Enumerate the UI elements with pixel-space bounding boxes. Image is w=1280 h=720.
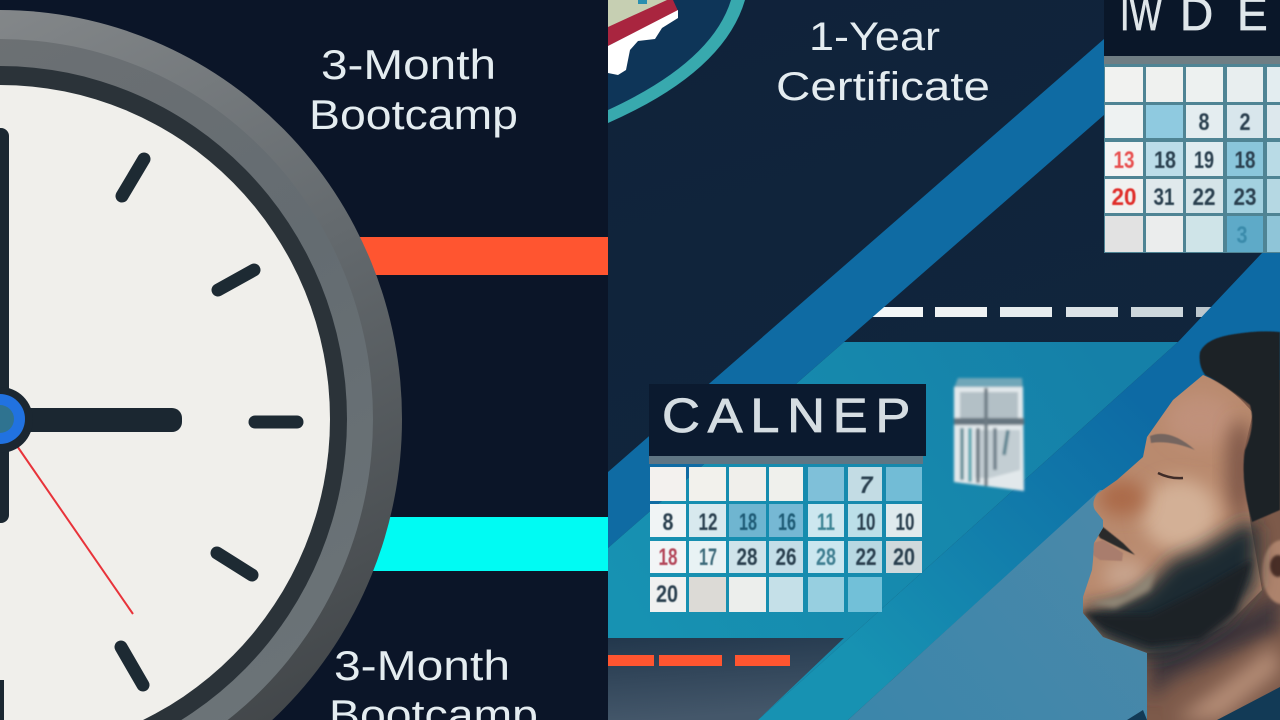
calendar numbers [656, 472, 915, 608]
calendar numbers: 18 [739, 509, 757, 536]
heading: 1-Year Certificate: Certificate [776, 65, 990, 109]
hour ticks [121, 159, 297, 685]
calendar numbers: 18 [1234, 147, 1256, 174]
calendar numbers: 31 [1154, 184, 1174, 211]
calendar numbers: 18 [1154, 147, 1176, 174]
calendar numbers: 20 [1112, 184, 1136, 211]
calendar numbers: 8 [662, 509, 674, 536]
white dashed line [869, 307, 1216, 317]
teal diagonal panel [608, 342, 1178, 720]
heading: 1-Year Certificate [776, 15, 990, 109]
calendar numbers: 13 [1114, 147, 1134, 174]
calendar: center [649, 384, 926, 612]
calendar numbers: 28 [736, 544, 758, 571]
beard [1083, 520, 1258, 658]
calendar numbers: 7 [860, 472, 874, 499]
calendar grid [1104, 56, 1280, 253]
calendar numbers: 8 [1198, 109, 1210, 136]
neck shading [1150, 590, 1280, 720]
calendar numbers: 16 [778, 509, 796, 536]
neck [1147, 380, 1280, 720]
calendar numbers: 11 [817, 509, 835, 536]
closed eye [1158, 473, 1183, 478]
calendar numbers: 17 [699, 544, 717, 571]
panel: right background [608, 0, 1280, 720]
calendar numbers: 10 [856, 509, 876, 536]
calendar numbers [1112, 109, 1256, 249]
calendar numbers: 22 [1192, 184, 1216, 211]
icon: clock [0, 10, 402, 720]
heading: 3-Month Bootcamp top: 3-Month [321, 41, 496, 88]
calendar numbers: 20 [656, 581, 678, 608]
calendar numbers: 26 [776, 544, 796, 571]
cyan bar [340, 517, 608, 571]
calendar: top right [1104, 0, 1280, 253]
heading: 3-Month Bootcamp top: Bootcamp [309, 91, 518, 138]
eyebrow [1150, 434, 1195, 450]
face skin [1083, 375, 1262, 653]
calendar numbers: 19 [1194, 147, 1214, 174]
calendar numbers: 28 [816, 544, 836, 571]
calendar numbers: 10 [896, 509, 914, 536]
calendar header [649, 384, 926, 456]
orange bar [340, 237, 608, 275]
heading: 1-Year Certificate: 1-Year [809, 15, 940, 59]
icon: circular badge fragment [608, 0, 745, 123]
ear [1262, 540, 1280, 604]
calendar header: CALNEP [662, 390, 918, 443]
calendar numbers: 3 [1236, 222, 1248, 249]
clock rim [0, 10, 402, 720]
mustache and lips [1097, 527, 1135, 555]
calendar numbers: 18 [658, 544, 678, 571]
heading: 3-Month Bootcamp bottom: 3-Month [334, 642, 510, 689]
diagonal blue band lower [758, 235, 1280, 720]
collar [1127, 687, 1280, 720]
steel blue diagonal panel [848, 490, 1280, 720]
calendar numbers: 23 [1234, 184, 1256, 211]
diagonal blue band upper [608, 39, 1104, 548]
clock hub [0, 387, 33, 453]
clock hands [0, 128, 182, 720]
hair [1200, 331, 1280, 522]
orange dashed line [608, 655, 790, 666]
clock face [0, 85, 330, 720]
calendar header [1104, 0, 1280, 57]
badge artwork [608, 0, 678, 75]
illustration: man's face in profile [1081, 331, 1280, 720]
icon: small blurred calendar [954, 378, 1024, 491]
facial features [1081, 394, 1280, 720]
slate corner panel [608, 638, 844, 720]
calendar numbers: 20 [893, 544, 915, 571]
calendar numbers: 22 [856, 544, 876, 571]
heading: 3-Month Bootcamp bottom [329, 642, 538, 720]
calendar numbers: 12 [698, 509, 718, 536]
calendar grid [649, 456, 923, 612]
calendar numbers: 2 [1240, 109, 1250, 136]
heading: 3-Month Bootcamp top [309, 41, 518, 138]
panel: left background [0, 0, 608, 720]
